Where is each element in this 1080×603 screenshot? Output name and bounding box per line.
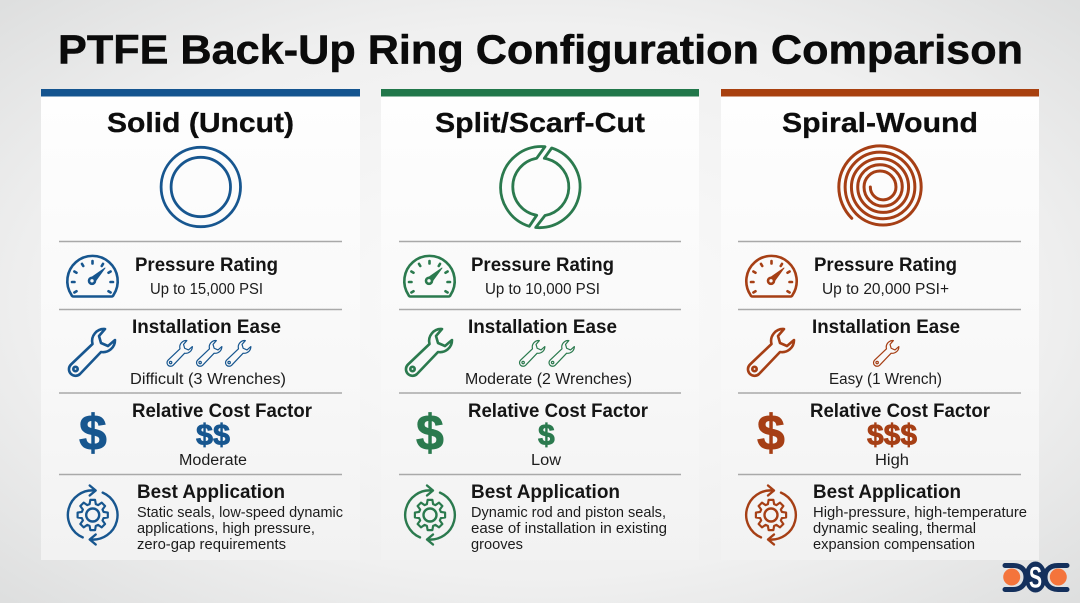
rating: three wrenches <box>167 341 251 366</box>
panel: spiral-wound <box>721 89 1039 560</box>
icon: gear cycle <box>68 486 118 544</box>
relative cost factor: Relative Cost Factor <box>810 400 990 422</box>
relative cost factor: High <box>875 452 909 469</box>
icon: dollar: $ <box>79 405 107 461</box>
relative cost factor: Relative Cost Factor <box>132 400 312 422</box>
relative cost factor: $$ <box>196 419 230 452</box>
icon: wrench <box>748 329 794 376</box>
relative cost factor: Low <box>531 452 562 469</box>
installation ease: Installation Ease <box>132 316 281 338</box>
title: PTFE Back-Up Ring Configuration Comparison <box>58 26 1023 72</box>
logo: DSC: S <box>1029 562 1042 594</box>
panel: solid uncut <box>41 89 360 560</box>
best application: Dynamic rod and piston seals, <box>471 504 666 521</box>
logo: DSC <box>1003 562 1067 594</box>
pressure rating: Up to 10,000 PSI <box>485 281 600 298</box>
best application <box>471 481 667 553</box>
best application: expansion compensation <box>813 536 975 553</box>
best application: Static seals, low-speed dynamic <box>137 504 343 521</box>
best application: Best Application <box>471 481 620 503</box>
best application <box>137 481 343 553</box>
pressure rating: Pressure Rating <box>135 254 278 276</box>
relative cost factor: Moderate <box>179 452 247 469</box>
best application: Best Application <box>813 481 961 503</box>
icon: pressure gauge <box>67 256 118 296</box>
best application: grooves <box>471 536 523 553</box>
pressure rating <box>814 254 957 298</box>
pressure rating: Up to 20,000 PSI+ <box>822 281 949 298</box>
icon: wrench <box>406 329 452 376</box>
relative cost factor: $ <box>538 419 555 452</box>
heading: split scarf-cut: Split/Scarf-Cut <box>435 107 645 138</box>
icon: gear cycle <box>746 486 796 544</box>
icon: scarf-cut ring <box>501 147 580 228</box>
icon: dollar: $ <box>416 405 444 461</box>
icon: solid ring <box>161 147 240 227</box>
installation ease <box>130 316 286 388</box>
best application: zero-gap requirements <box>137 536 286 553</box>
icon: gear cycle <box>405 486 455 544</box>
installation ease: Installation Ease <box>468 316 617 338</box>
best application <box>813 481 1027 553</box>
best application: dynamic sealing, thermal <box>813 520 976 537</box>
relative cost factor: Relative Cost Factor <box>468 400 648 422</box>
best application: applications, high pressure, <box>137 520 315 537</box>
relative cost factor <box>468 400 648 469</box>
relative cost factor <box>132 400 312 469</box>
best application: High-pressure, high-temperature <box>813 504 1027 521</box>
pressure rating <box>135 254 278 298</box>
relative cost factor <box>810 400 990 469</box>
heading: solid uncut: Solid (Uncut) <box>107 107 294 138</box>
pressure rating: Up to 15,000 PSI <box>150 281 263 298</box>
pressure rating <box>471 254 614 298</box>
heading: spiral-wound: Spiral-Wound <box>782 107 978 138</box>
best application: ease of installation in existing <box>471 520 667 537</box>
icon: pressure gauge <box>404 256 455 296</box>
icon: dollar: $ <box>757 405 785 461</box>
installation ease: Installation Ease <box>812 316 960 338</box>
installation ease <box>812 316 960 388</box>
icon: wrench <box>69 329 115 376</box>
best application: Best Application <box>137 481 285 503</box>
installation ease: Moderate (2 Wrenches) <box>465 371 632 388</box>
icon: spiral ring <box>839 146 921 225</box>
installation ease <box>465 316 632 388</box>
pressure rating: Pressure Rating <box>471 254 614 276</box>
rating: one wrench <box>874 341 899 366</box>
installation ease: Difficult (3 Wrenches) <box>130 371 286 388</box>
installation ease: Easy (1 Wrench) <box>829 371 942 388</box>
panel: split scarf-cut <box>381 89 699 560</box>
icon: pressure gauge <box>746 256 797 296</box>
relative cost factor: $$$ <box>867 419 917 452</box>
rating: two wrenches <box>520 341 574 366</box>
pressure rating: Pressure Rating <box>814 254 957 276</box>
